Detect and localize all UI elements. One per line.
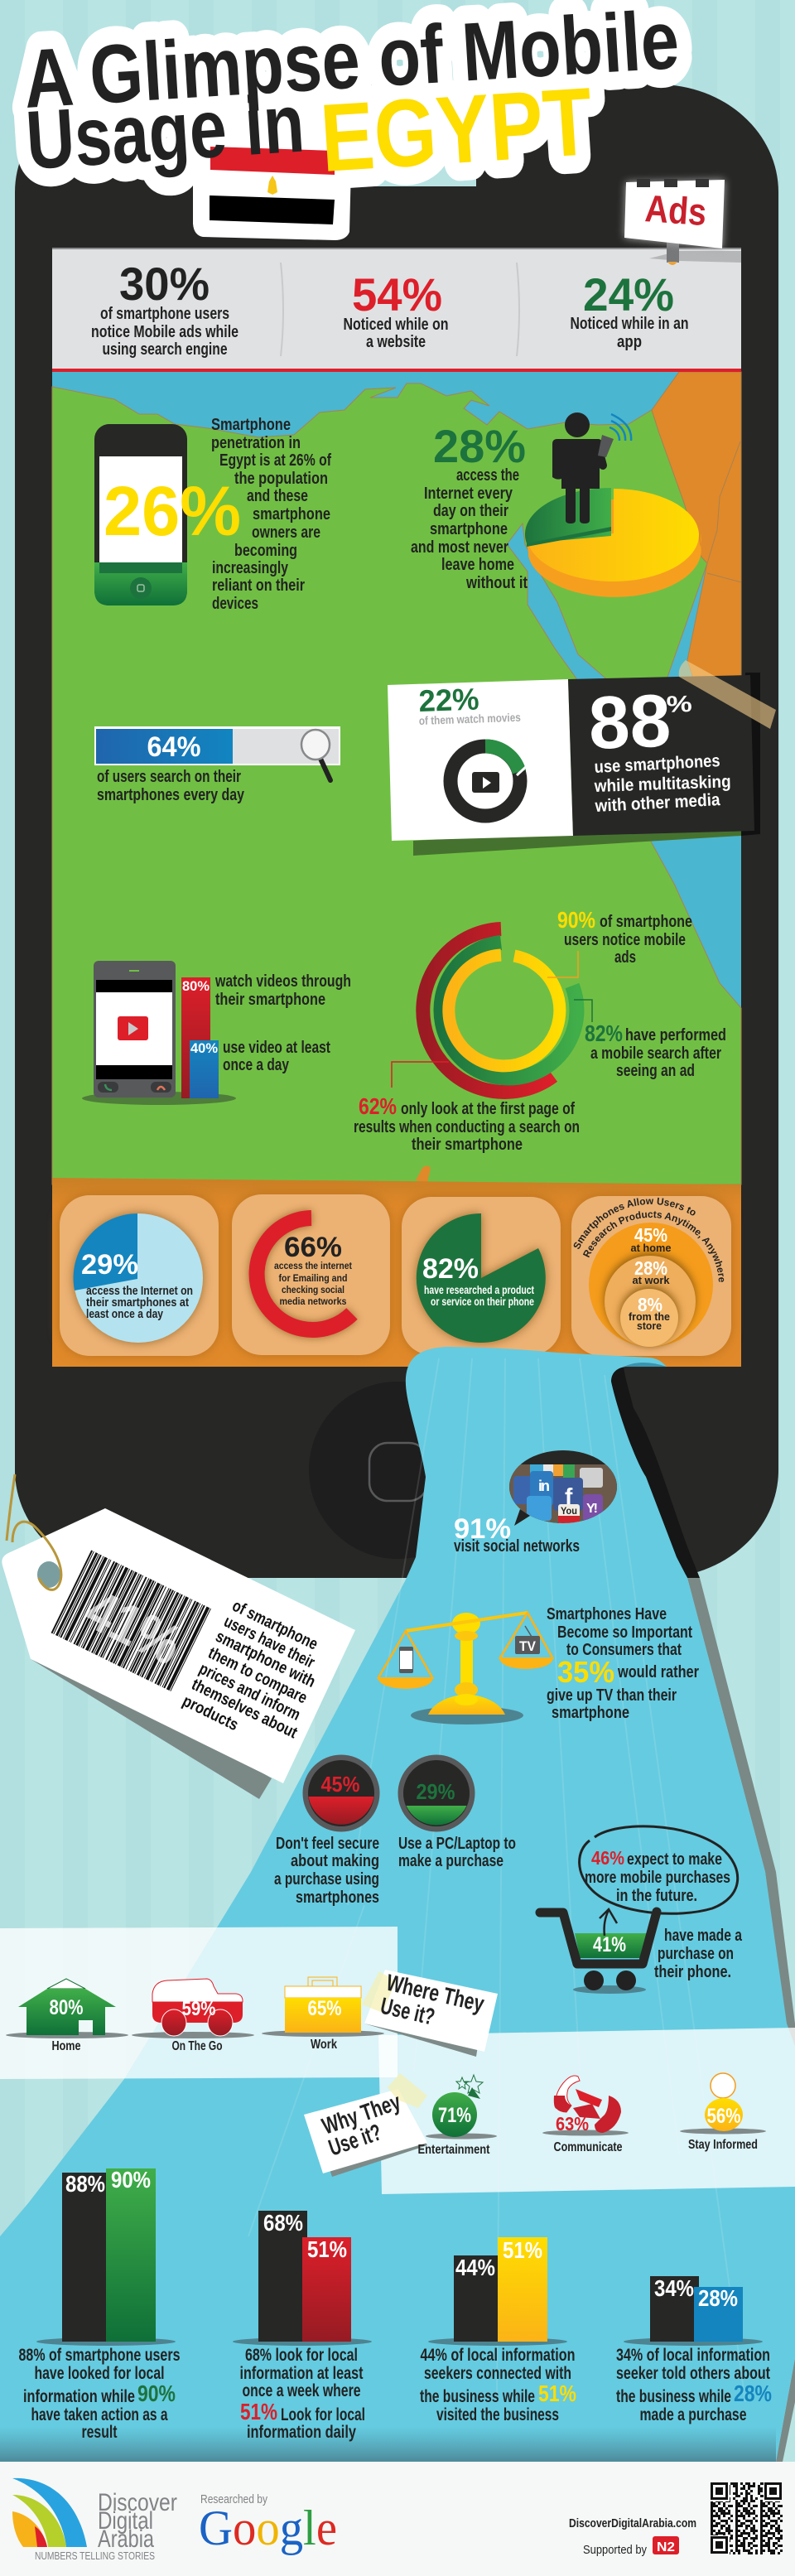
card: research anywhere: Smartphones Allow Users to: [573, 1198, 696, 1249]
title outline: [22, 0, 682, 192]
icon: car 59%: 59%: [182, 1998, 215, 2020]
text: 82% mobile search: seeing an ad: [616, 1062, 695, 1080]
text: smartphone penetration: devices: [212, 595, 258, 613]
bar chart: 44% 51%: 51%: [503, 2237, 542, 2263]
text: 62% first page: only look at the first page of: [401, 1100, 575, 1118]
text: 90% notice ads: of smartphone: [600, 913, 692, 931]
logo: discover digital arabia: NUMBERS TELLING STORIES: [35, 2549, 155, 2562]
card: 82% pie: 82%: [422, 1253, 479, 1285]
icon: communicate phone 63%: [542, 2076, 629, 2154]
stat: 28%: 28%: [433, 420, 526, 472]
pie chart: 28% internet access: [525, 488, 701, 597]
text: local information 34%: [616, 2346, 772, 2424]
text: smartphone penetration: [211, 416, 331, 613]
icon: briefcase 65%: 65%: [308, 1997, 341, 2020]
icon: egyptian flag: [193, 147, 351, 240]
callout: 46% expect more purchases: [580, 1826, 738, 1913]
text: smartphone penetration: Egypt is at 26% of: [219, 451, 331, 470]
icon: man with smartphone: [552, 412, 631, 523]
logo: discover digital arabia: Discover: [98, 2489, 177, 2516]
text: search: smartphones every day: [97, 786, 245, 804]
note: where they use it: Where They: [384, 1970, 487, 2017]
text: smartphone penetration: smartphone: [253, 505, 330, 523]
panel: orange stats band: [52, 1166, 741, 1367]
panel: ad notice stats: of smartphone users: [100, 305, 229, 323]
home button: [309, 1382, 486, 1559]
card: research anywhere: Research Products Anytime, Anywhere: [583, 1211, 724, 1282]
text: made a purchase: their phone.: [654, 1963, 731, 1981]
title: EGYPT: [317, 67, 595, 192]
callout: 46% expect more purchases: 46%: [591, 1847, 624, 1869]
text: internet access: smartphone: [430, 520, 508, 538]
card: research anywhere: at home: [631, 1242, 671, 1254]
card: research anywhere: 8%: [638, 1294, 662, 1315]
icon: stay informed bulb 56%: 56%: [707, 2105, 740, 2128]
card: 66% ring: [257, 1218, 352, 1329]
text: local information 88%: information while: [23, 2387, 135, 2406]
note: why they use it: Why They: [319, 2088, 404, 2139]
title: [22, 0, 682, 192]
icon: briefcase 65%: [262, 1977, 384, 2052]
text: pc laptop: make a purchase: [398, 1852, 504, 1870]
panel: multitasking poster: 22%: [418, 682, 479, 718]
title outline: Usage in: [23, 77, 307, 187]
icon: ads sign: [624, 179, 741, 265]
card: 29% pie: access the Internet on: [86, 1284, 193, 1298]
text: video usage: once a day: [223, 1056, 290, 1074]
text: local information 44%: 44% of local information: [421, 2346, 575, 2365]
panel: multitasking poster: of them watch movies: [419, 711, 521, 727]
title: Usage in: [23, 77, 307, 187]
panel: multitasking poster: while multitasking: [593, 772, 731, 796]
phone body: [15, 84, 778, 1578]
logo: researched by google: Researched by: [200, 2492, 267, 2506]
text: local information 68%: 51%: [240, 2399, 277, 2424]
card: research anywhere: from the: [629, 1310, 670, 1323]
panel: ad notice stats: Noticed while in an: [570, 315, 689, 333]
icon: ads sign: Ads: [643, 186, 708, 234]
text: video usage: use video at least: [223, 1039, 330, 1057]
panel: multitasking poster: %: [666, 691, 692, 717]
text: website and supporter: DiscoverDigitalArabia.com: [569, 2516, 696, 2530]
text: smartphone penetration: and these: [247, 487, 308, 505]
text: smartphone penetration: increasingly: [212, 559, 289, 577]
bar chart: 88% 90%: 90%: [111, 2167, 151, 2192]
card: 66% ring: media networks: [280, 1295, 347, 1307]
logo: discover digital arabia: Digital: [98, 2507, 153, 2535]
text: 35% rather give up tv: would rather: [617, 1663, 699, 1681]
panel: ad notice stats: app: [617, 333, 642, 351]
logo: discover digital arabia: Arabia: [98, 2525, 154, 2553]
icon: car 59%: [132, 1979, 254, 2053]
card: research anywhere: 28%: [634, 1257, 667, 1279]
note: where they use it: [362, 1970, 498, 2057]
panel: ad notice stats: 30%: [119, 258, 210, 310]
text: local information 44%: the business while: [420, 2387, 535, 2406]
text: video usage: their smartphone: [215, 991, 325, 1009]
stat: 91% social networks: [454, 1513, 580, 1556]
panel: multitasking poster: use smartphones: [594, 751, 720, 777]
text: internet access: access the: [456, 466, 519, 485]
text: local information 44%: visited the business: [436, 2405, 559, 2424]
text: 35% rather give up tv: [547, 1605, 699, 1722]
text: search: [97, 768, 245, 804]
price tag: 41%: prices and inform: [196, 1660, 303, 1725]
text: 35% rather give up tv: 35%: [557, 1655, 614, 1689]
text: local information 68%: 68% look for local: [245, 2346, 358, 2365]
text: website and supporter: N2: [657, 2540, 675, 2554]
card: 66% ring: access the internet: [274, 1260, 352, 1271]
panel: ad notice stats: [52, 248, 741, 372]
text: 35% rather give up tv: smartphone: [552, 1704, 629, 1722]
price tag: 41%: smartphone with: [213, 1628, 318, 1691]
text: made a purchase: purchase on: [658, 1945, 734, 1963]
text: 35% rather give up tv: give up TV than their: [547, 1686, 677, 1705]
text: internet access: and most never: [411, 538, 508, 557]
text: local information 68%: information daily: [247, 2423, 356, 2442]
panel: multitasking poster: [388, 673, 760, 856]
stat: 91% social networks: visit social networks: [454, 1537, 580, 1556]
phone screen map background: [52, 372, 741, 1184]
text: local information 88%: 90%: [137, 2381, 176, 2406]
text: local information 44%: 51%: [538, 2381, 576, 2406]
icon: stay informed bulb 56%: Stay Informed: [688, 2138, 758, 2152]
text: smartphone penetration: owners are: [252, 523, 320, 542]
text: local information 88%: have looked for local: [35, 2364, 164, 2383]
search bar 64%: 64%: [147, 731, 200, 763]
icon: balance scale: TV: [519, 1638, 537, 1654]
text: local information 68%: once a week where: [242, 2381, 361, 2400]
bar chart: 44% 51%: [428, 2237, 567, 2346]
icon: shopping cart 41%: 41%: [593, 1933, 626, 1956]
text: 90% notice ads: 90%: [557, 907, 595, 933]
text: local information 34%: 28%: [734, 2381, 772, 2406]
text: internet access: Internet every: [424, 485, 513, 503]
footer: [0, 2462, 795, 2576]
text: internet access: leave home: [441, 556, 514, 574]
icon: car 59%: On The Go: [172, 2039, 223, 2053]
price tag: 41%: of smartphone: [229, 1597, 320, 1654]
text: smartphone penetration: becoming: [234, 542, 297, 560]
price tag: 41%: [2, 1474, 355, 1799]
icon: stay informed bulb 56%: [680, 2073, 766, 2152]
text: local information 68%: information at least: [240, 2364, 363, 2383]
card: 29% pie: their smartphones at: [86, 1295, 189, 1310]
text: internet access: day on their: [433, 502, 508, 520]
panel: ad notice stats: notice Mobile ads while: [91, 323, 238, 341]
text: don't feel secure: smartphones: [296, 1889, 379, 1907]
note: where they use it: Use it?: [378, 1993, 437, 2030]
callout: 46% expect more purchases: in the future.: [616, 1887, 697, 1905]
text: internet access: without it: [465, 574, 528, 592]
icon: communicate phone 63%: Communicate: [553, 2140, 623, 2154]
text: search: of users search on their: [97, 768, 241, 786]
logo: researched by google: Google: [199, 2501, 337, 2555]
bars: video 80% and 40%: 40%: [190, 1040, 218, 1056]
ring chart: ad stats: [392, 929, 592, 1092]
card: 66% ring: 66%: [284, 1232, 342, 1263]
gauge: 29%: [398, 1754, 475, 1832]
icon: social networks bubble: Y!: [586, 1502, 598, 1516]
text: local information 44%: seekers connected with: [424, 2364, 571, 2383]
card: 66% ring: checking social: [282, 1284, 344, 1295]
text: local information 34%: made a purchase: [639, 2405, 747, 2424]
card: research anywhere: store: [637, 1319, 662, 1332]
text: smartphone penetration: penetration in: [211, 434, 301, 452]
price tag: 41%: users have their: [221, 1613, 318, 1672]
text: internet access: [411, 466, 528, 592]
text: local information 88%: have taken action as a: [31, 2405, 168, 2424]
text: local information 68%: [240, 2346, 365, 2442]
text: video usage: watch videos through: [214, 972, 351, 991]
bar chart: 68% 51%: 68%: [263, 2210, 303, 2236]
card: 82% pie: have researched a product: [424, 1283, 534, 1296]
text: don't feel secure: [274, 1835, 379, 1907]
panel: ad notice stats: a website: [366, 333, 426, 351]
text: 82% mobile search: 82%: [585, 1020, 623, 1046]
card: research anywhere: [573, 1198, 724, 1352]
text: 62% first page: their smartphone: [412, 1136, 523, 1154]
text: local information 44%: [420, 2346, 576, 2424]
text: 82% mobile search: a mobile search after: [590, 1044, 721, 1063]
icon: social networks bubble: f: [565, 1483, 573, 1509]
logo: discover digital arabia: [12, 2478, 177, 2562]
price tag: 41%: products: [180, 1692, 241, 1734]
price tag: 41%: themselves about: [189, 1676, 301, 1743]
bar chart: 44% 51%: 44%: [455, 2255, 495, 2280]
tape on poster: [679, 660, 776, 729]
text: pc laptop: [398, 1835, 516, 1870]
icon: smartphone 26%: [94, 424, 187, 605]
bar chart: 34% 28%: [624, 2275, 763, 2346]
icon: home 80%: 80%: [50, 1996, 83, 2019]
panel: ad notice stats: 54%: [352, 268, 442, 321]
text: local information 88%: [18, 2346, 181, 2442]
icon: video phone: [82, 961, 236, 1105]
note: why they use it: [304, 2073, 427, 2177]
bar chart: 88% 90%: 88%: [65, 2171, 105, 2197]
text: local information 68%: Look for local: [281, 2405, 365, 2424]
icon: qr code: [710, 2482, 783, 2555]
text: 90% notice ads: users notice mobile: [564, 931, 686, 949]
bar chart: 68% 51%: 51%: [307, 2236, 347, 2262]
icon: social networks bubble: [509, 1450, 617, 1527]
icon: social networks bubble: in: [538, 1478, 550, 1494]
panel: ad notice stats: using search engine: [103, 340, 227, 359]
icon: home 80%: Home: [51, 2039, 81, 2053]
text: 62% first page: [354, 1093, 580, 1154]
text: 90% notice ads: [557, 907, 692, 967]
text: 62% first page: results when conducting a search on: [354, 1118, 580, 1136]
icon: home 80%: [6, 1979, 128, 2053]
bars: video 80% and 40%: 80%: [182, 978, 210, 994]
panel: why they use it: [378, 2028, 795, 2194]
text: 35% rather give up tv: Smartphones Have: [547, 1605, 667, 1623]
bar chart: 88% 90%: [36, 2167, 176, 2346]
icon: briefcase 65%: Work: [311, 2038, 337, 2052]
card: research anywhere: at work: [633, 1274, 670, 1286]
text: pc laptop: Use a PC/Laptop to: [398, 1835, 516, 1853]
callout: 46% expect more purchases: expect to make: [627, 1850, 722, 1869]
gauge: 45%: 45%: [321, 1772, 359, 1797]
icon: balance scale: [378, 1613, 553, 1725]
gauge: 45%: [303, 1754, 379, 1832]
bar chart: 34% 28%: 34%: [654, 2275, 694, 2301]
stat: 26%: 26%: [104, 472, 241, 550]
card: 29% pie: least once a day: [86, 1307, 164, 1321]
bars: video 80% and 40%: [181, 977, 219, 1098]
text: made a purchase: [654, 1927, 743, 1981]
bar chart: 34% 28%: 28%: [698, 2285, 738, 2311]
text: smartphone penetration: reliant on their: [212, 576, 305, 595]
icon: shopping cart 41%: [540, 1909, 657, 1994]
text: don't feel secure: Don't feel secure: [276, 1835, 379, 1853]
card: research anywhere: 45%: [634, 1224, 667, 1246]
icon: communicate phone 63%: 63%: [556, 2113, 589, 2135]
panel: ad notice stats: 24%: [583, 268, 674, 321]
panel: where they use it: [0, 1927, 398, 2079]
text: 62% first page: 62%: [359, 1093, 397, 1119]
icon: entertainment bomb 71%: Entertainment: [417, 2143, 490, 2157]
text: smartphone penetration: Smartphone: [211, 416, 291, 434]
text: website and supporter: [569, 2516, 696, 2557]
panel: multitasking poster: 88: [587, 680, 672, 765]
text: 82% mobile search: have performed: [625, 1026, 726, 1044]
text: video usage: [214, 972, 351, 1074]
card: 29% pie: 29%: [81, 1249, 138, 1281]
stat: 91% social networks: 91%: [454, 1513, 511, 1545]
gauge: 29%: 29%: [416, 1779, 455, 1804]
text: 35% rather give up tv: Become so Important: [557, 1623, 692, 1642]
icon: entertainment bomb 71%: [417, 2075, 497, 2157]
price tag: 41%: 41%: [76, 1578, 191, 1677]
search bar 64%: [94, 726, 340, 780]
icon: social networks bubble: You: [561, 1505, 577, 1517]
icon: entertainment bomb 71%: 71%: [438, 2104, 471, 2127]
card: 82% pie: [417, 1213, 546, 1343]
text: 82% mobile search: [585, 1020, 726, 1080]
text: don't feel secure: about making: [291, 1852, 379, 1870]
card: 29% pie: [74, 1213, 203, 1343]
callout: 46% expect more purchases: more mobile purchases: [585, 1869, 730, 1887]
panel: ad notice stats: Noticed while on: [343, 316, 449, 334]
text: don't feel secure: a purchase using: [274, 1870, 379, 1889]
blue sheet flowing out of screen: [0, 1347, 795, 2462]
bar chart: 68% 51%: [233, 2210, 372, 2346]
price tag: 41%: them to compare: [205, 1644, 310, 1707]
text: 90% notice ads: ads: [614, 948, 636, 967]
text: made a purchase: have made a: [664, 1927, 743, 1945]
text: 35% rather give up tv: to Consumers that: [566, 1641, 682, 1659]
title outline: EGYPT: [317, 67, 595, 192]
card: 82% pie: or service on their phone: [431, 1295, 534, 1308]
text: smartphone penetration: the population: [234, 470, 328, 488]
text: local information 88%: result: [81, 2423, 118, 2442]
text: website and supporter: Supported by: [583, 2543, 647, 2557]
card: 66% ring: for Emailing and: [278, 1272, 348, 1284]
note: why they use it: Use it?: [325, 2119, 384, 2161]
panel: multitasking poster: with other media: [594, 790, 720, 816]
text: local information 34%: the business while: [616, 2387, 731, 2406]
text: local information 88%: 88% of smartphone users: [18, 2346, 181, 2365]
